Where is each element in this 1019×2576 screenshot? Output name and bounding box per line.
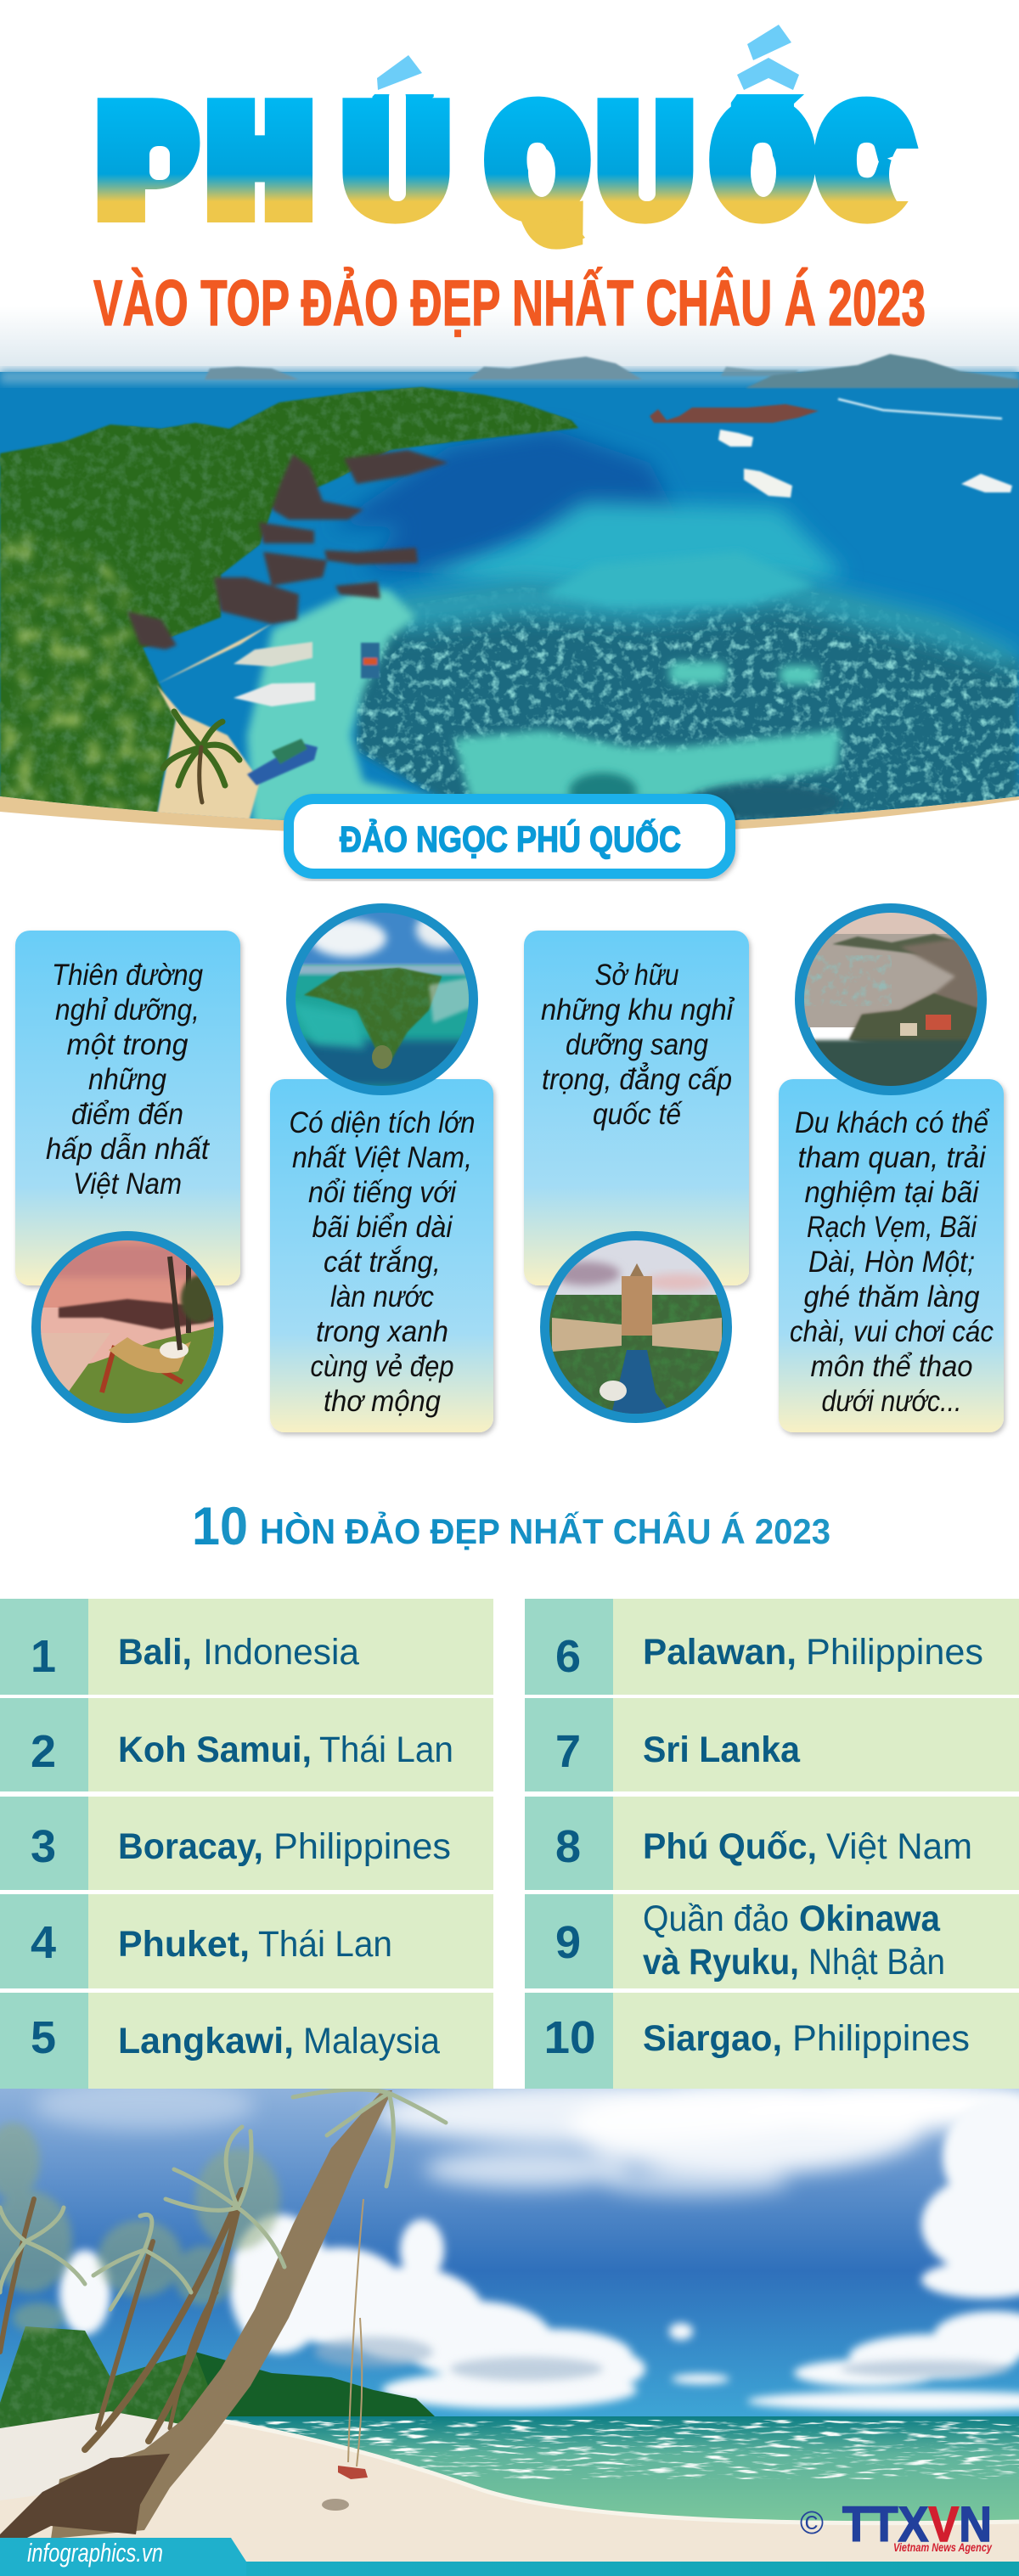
card 4 text — [790, 1106, 994, 1418]
table: right column ranks 6–10: Okinawa — [799, 1898, 941, 1939]
table: right column ranks 6–10: Sri Lanka — [643, 1730, 801, 1770]
palm canopies — [0, 2123, 280, 2333]
title: PHÚ QUỐC — [104, 0, 926, 248]
table: left column ranks 1–5: Malaysia — [303, 2021, 440, 2061]
table: right column ranks 6–10 — [525, 1599, 1019, 2089]
card 4 text: Du khách có thể — [795, 1106, 989, 1139]
card 4 text: Dài, Hòn Một; — [808, 1246, 975, 1279]
card 3 text: những khu nghỉ — [541, 993, 735, 1026]
table: right column ranks 6–10: Philippines — [792, 2018, 970, 2059]
table: right column ranks 6–10: Việt Nam — [826, 1826, 972, 1867]
panel: card 4 — [779, 1079, 1004, 1432]
card 4 text: ghé thăm làng — [803, 1280, 980, 1313]
table: right column ranks 6–10: 8 — [555, 1821, 581, 1872]
palm — [163, 711, 239, 802]
card 4 text: chài, vui chơi các — [790, 1315, 994, 1348]
hero photo: aerial view of Phú Quốc coast — [0, 306, 1019, 830]
table: right column ranks 6–10: Siargao, — [643, 2018, 782, 2059]
card 3 text: Sở hữu — [594, 959, 679, 992]
puffy clouds — [59, 2097, 1019, 2411]
card 2 text: nổi tiếng với — [308, 1176, 457, 1209]
table: left column ranks 1–5: Indonesia — [203, 1632, 359, 1673]
card 1 text: điểm đến — [71, 1098, 183, 1131]
palm trunks — [0, 2191, 242, 2449]
table: left column ranks 1–5: Langkawi, — [118, 2021, 294, 2061]
card 4 text: môn thể thao — [810, 1350, 973, 1383]
table: left column ranks 1–5: Philippines — [273, 1826, 451, 1867]
logo: TTXVN Vietnam News Agency: Vietnam News Agency — [893, 2540, 993, 2554]
main leaning palm — [51, 2090, 392, 2539]
card 3 text: dưỡng sang — [566, 1028, 708, 1061]
table: right column ranks 6–10: Phú Quốc, — [643, 1826, 817, 1867]
table: left column ranks 1–5: Bali, — [118, 1632, 192, 1673]
card 3 text: trọng, đẳng cấp — [542, 1062, 732, 1096]
palm fronds — [0, 2089, 446, 2309]
Q tail — [549, 219, 585, 248]
card 1 text: Việt Nam — [73, 1167, 182, 1201]
card 2 text: bãi biển dài — [312, 1211, 453, 1244]
bottom photo: beach with leaning palm and swing — [0, 2080, 1019, 2576]
card 1 text: một trong — [66, 1028, 189, 1061]
table: left column ranks 1–5: Koh Samui, — [118, 1730, 312, 1770]
footer bar — [0, 2538, 1019, 2576]
section heading: top 10 islands — [192, 1497, 830, 1556]
card 4 text: Rạch Vẹm, Bãi — [807, 1211, 977, 1244]
card 4 text: dưới nước... — [822, 1385, 961, 1418]
photo circle 4: fishing village bay — [798, 908, 985, 1091]
card 1 text — [46, 959, 210, 1201]
card 2 text: cát trắng, — [324, 1246, 441, 1279]
table: left column ranks 1–5: 3 — [31, 1821, 56, 1872]
card 4 text: tham quan, trải — [798, 1141, 987, 1174]
card 2 text — [289, 1106, 476, 1418]
table: left column ranks 1–5: Boracay, — [118, 1826, 263, 1867]
panel: card 3 — [524, 931, 749, 1285]
card 2 text: thơ mộng — [324, 1385, 441, 1418]
card 2 text: nhất Việt Nam, — [292, 1141, 472, 1174]
footer source text: infographics.vn — [27, 2538, 163, 2568]
boats — [234, 430, 1012, 785]
table: right column ranks 6–10: Nhật Bản — [808, 1942, 945, 1983]
table: right column ranks 6–10: Palawan, — [643, 1632, 797, 1673]
table: right column ranks 6–10: Quần đảo — [643, 1898, 789, 1939]
table: right column ranks 6–10: 7 — [555, 1726, 581, 1777]
table: right column ranks 6–10: và Ryuku, — [643, 1942, 799, 1983]
photo circle 2: aerial green island — [289, 908, 476, 1092]
section heading: top 10 islands: HÒN ĐẢO ĐẸP NHẤT CHÂU Á 2023 — [260, 1510, 830, 1551]
table: left column ranks 1–5: 4 — [31, 1917, 56, 1968]
table: left column ranks 1–5: 5 — [31, 2012, 56, 2063]
section heading: top 10 islands: 10 — [192, 1497, 248, 1556]
accent marks — [377, 25, 799, 90]
table: right column ranks 6–10: 9 — [555, 1917, 581, 1968]
banner: ĐẢO NGỌC PHÚ QUỐC: ĐẢO NGỌC PHÚ QUỐC — [340, 818, 681, 860]
card 1 text: hấp dẫn nhất — [46, 1133, 210, 1166]
letter openings — [149, 0, 926, 201]
card 1 text: nghỉ dưỡng, — [55, 993, 200, 1026]
card 2 text: Có diện tích lớn — [289, 1106, 476, 1139]
banner: ĐẢO NGỌC PHÚ QUỐC — [289, 799, 730, 874]
sand edge under hero photo — [0, 796, 1019, 836]
card 2 text: trong xanh — [316, 1315, 448, 1348]
title word QUỐC: QUỐC — [493, 82, 906, 236]
card 3 text — [541, 959, 735, 1131]
table: right column ranks 6–10: 10 — [543, 2012, 596, 2063]
table: left column ranks 1–5 — [0, 1599, 493, 2089]
table: right column ranks 6–10: Philippines — [806, 1632, 983, 1673]
card 2 text: làn nước — [330, 1280, 434, 1313]
title word PHÚ: PHÚ — [104, 84, 443, 237]
card 1 text: những — [88, 1063, 166, 1096]
card 3 text: quốc tế — [593, 1098, 683, 1131]
panel: card 1 — [15, 931, 240, 1285]
card 4 text: nghiệm tại bãi — [805, 1176, 980, 1209]
table: right column ranks 6–10: 6 — [555, 1631, 581, 1682]
logo: TTXVN Vietnam News Agency: TTXVN — [842, 2497, 992, 2552]
table: left column ranks 1–5: 1 — [31, 1631, 56, 1682]
table: left column ranks 1–5: Thái Lan — [319, 1730, 453, 1770]
table: left column ranks 1–5: 2 — [31, 1726, 56, 1777]
card 1 text: Thiên đường — [52, 959, 203, 992]
logo: TTXVN Vietnam News Agency: © — [800, 2506, 824, 2541]
table: left column ranks 1–5: Thái Lan — [258, 1924, 392, 1965]
photo circle 1: resort hammock at sunset — [34, 1235, 222, 1418]
high clouds — [34, 2080, 1019, 2196]
card 2 text: cùng vẻ đẹp — [311, 1350, 453, 1383]
panel: card 2 — [270, 1079, 493, 1432]
swing — [338, 2199, 368, 2479]
table: left column ranks 1–5: Phuket, — [118, 1924, 250, 1965]
photo circle 3: luxury resort — [543, 1235, 730, 1418]
